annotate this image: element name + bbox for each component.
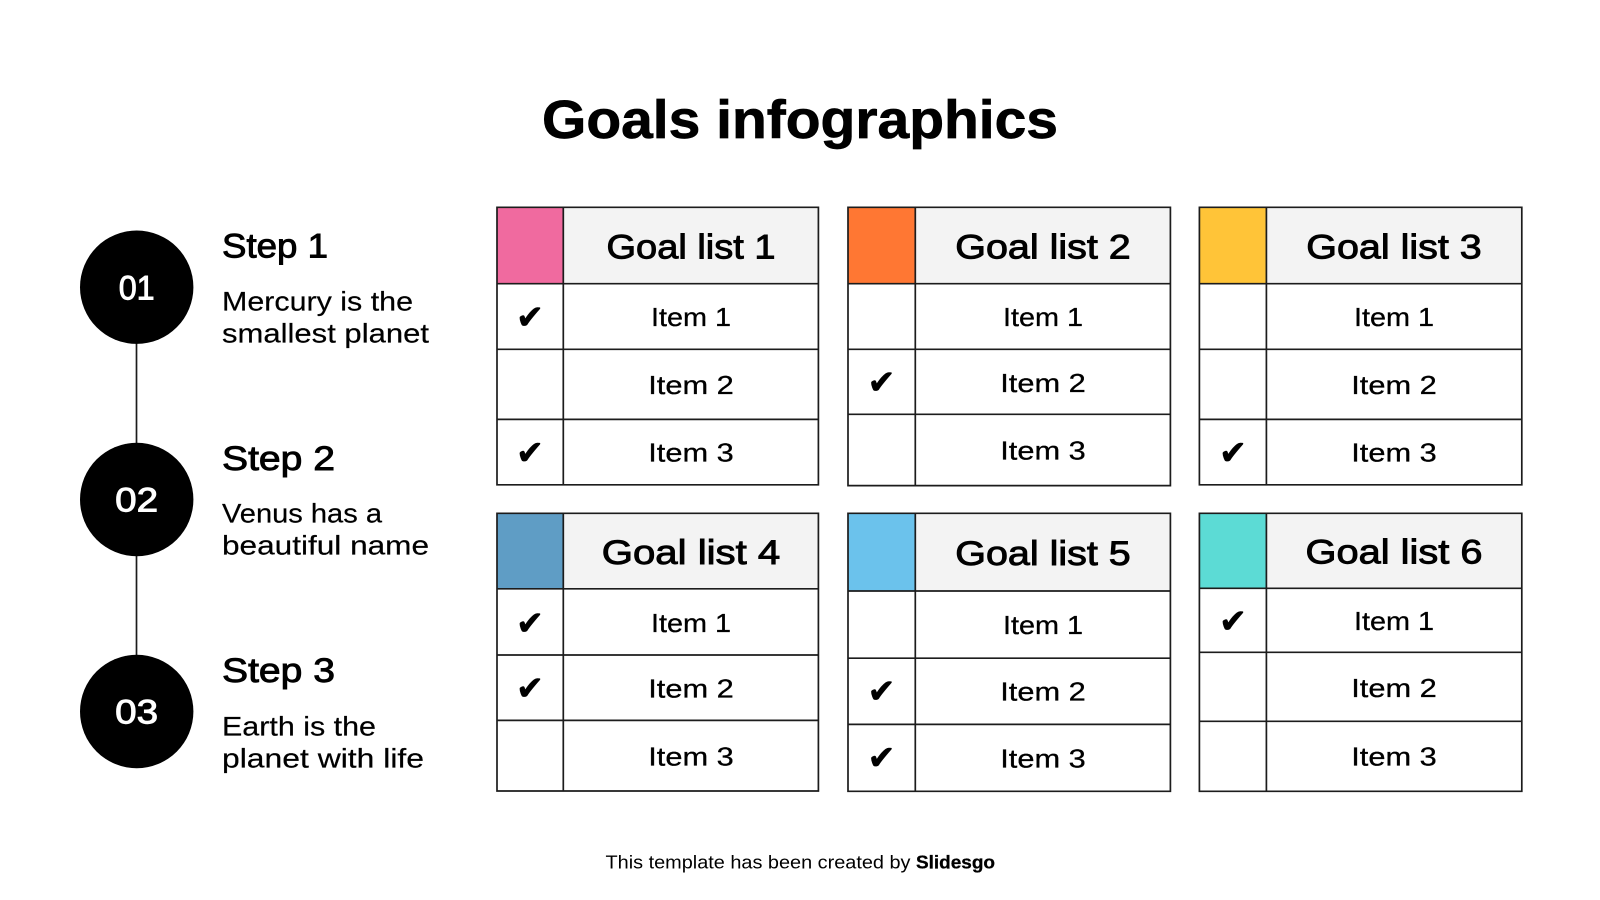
item 1: Item 1 bbox=[1354, 606, 1434, 636]
item 3 bbox=[1219, 433, 1437, 472]
step 3 number badge: 03 bbox=[115, 694, 158, 732]
step 1 description: Mercury is the bbox=[222, 287, 413, 317]
item 1 bbox=[1219, 602, 1434, 640]
header background bbox=[563, 513, 818, 589]
item 1: Item 1 bbox=[1354, 302, 1434, 332]
item 3: Item 3 bbox=[1351, 742, 1437, 772]
table grid bbox=[848, 513, 1170, 791]
colour swatch: yellow bbox=[1199, 207, 1266, 284]
item 2: ✔ bbox=[516, 668, 544, 708]
item 1: Item 1 bbox=[1003, 302, 1083, 332]
table grid bbox=[497, 207, 818, 485]
header background bbox=[915, 207, 1170, 284]
table grid bbox=[848, 207, 1170, 486]
item 1: Item 1 bbox=[651, 608, 731, 638]
item 3: Item 3 bbox=[648, 438, 734, 468]
panel: steps timeline bbox=[80, 228, 430, 774]
step 1 bbox=[80, 228, 430, 349]
panel: goal list 3 bbox=[1199, 207, 1522, 485]
step 1 description bbox=[222, 287, 430, 349]
panel: goal list 6 bbox=[1199, 513, 1522, 791]
table grid bbox=[497, 513, 818, 791]
colour swatch: teal bbox=[1199, 513, 1266, 588]
panel: goal list 4 bbox=[497, 513, 818, 791]
colour swatch: pink bbox=[497, 207, 563, 284]
item 2 bbox=[868, 362, 1086, 402]
item 2: Item 2 bbox=[1000, 676, 1086, 706]
step 3 heading: Step 3 bbox=[222, 652, 335, 690]
item 2 bbox=[868, 672, 1086, 710]
item 1: ✔ bbox=[516, 604, 544, 642]
step 2 number badge bbox=[80, 443, 193, 556]
heading: Goal list 4 bbox=[602, 534, 780, 572]
step 3 description: planet with life bbox=[222, 744, 424, 774]
heading: Goal list 2 bbox=[955, 228, 1131, 266]
step 1 heading: Step 1 bbox=[222, 228, 328, 266]
item 2 bbox=[516, 668, 734, 708]
header background bbox=[915, 513, 1170, 591]
item 1: Item 1 bbox=[1003, 610, 1083, 640]
colour swatch: light blue bbox=[848, 513, 915, 591]
item 2: ✔ bbox=[868, 362, 895, 402]
header background bbox=[1266, 513, 1521, 588]
table grid bbox=[1199, 207, 1522, 485]
step 2 description: beautiful name bbox=[222, 531, 429, 561]
item 3: ✔ bbox=[1219, 433, 1247, 472]
item 3: Item 3 bbox=[1000, 744, 1086, 774]
connector line: step 1 to step 2 bbox=[136, 340, 138, 448]
item 3: ✔ bbox=[868, 738, 895, 777]
heading: Goal list 5 bbox=[955, 535, 1131, 573]
item 1: Item 1 bbox=[651, 302, 731, 332]
step 1 number badge bbox=[80, 231, 193, 344]
footer credit: This template has been created by bbox=[606, 851, 911, 872]
item 2: Item 2 bbox=[1000, 368, 1086, 398]
item 2: Item 2 bbox=[1351, 673, 1437, 703]
item 3: ✔ bbox=[516, 433, 544, 472]
item 1: ✔ bbox=[516, 298, 544, 336]
item 2: Item 2 bbox=[648, 370, 734, 400]
item 1 bbox=[516, 604, 731, 642]
header background bbox=[563, 207, 818, 284]
panel: goal list 2 bbox=[848, 207, 1170, 486]
header background bbox=[1266, 207, 1521, 284]
item 1 bbox=[516, 298, 731, 336]
heading: Goal list 3 bbox=[1306, 228, 1482, 266]
item 3: Item 3 bbox=[1000, 436, 1086, 466]
item 3: Item 3 bbox=[1351, 438, 1437, 468]
step 3 bbox=[80, 652, 424, 774]
step 1 description: smallest planet bbox=[222, 319, 430, 349]
step 1 number badge: 01 bbox=[119, 270, 155, 308]
item 2: Item 2 bbox=[1351, 370, 1437, 400]
item 3 bbox=[868, 738, 1086, 777]
heading: Goal list 1 bbox=[606, 228, 776, 266]
step 3 description bbox=[222, 712, 424, 774]
colour swatch: orange bbox=[848, 207, 915, 284]
footer credit: Slidesgo bbox=[916, 851, 995, 872]
step 3 description: Earth is the bbox=[222, 712, 376, 742]
step 2 heading: Step 2 bbox=[222, 440, 335, 478]
title: Goals infographics bbox=[542, 90, 1058, 150]
panel: goal list 5 bbox=[848, 513, 1170, 791]
panel: goal list 1 bbox=[497, 207, 818, 485]
step 2 description bbox=[222, 499, 429, 561]
connector line: step 2 to step 3 bbox=[136, 552, 138, 660]
item 2: ✔ bbox=[868, 672, 895, 710]
colour swatch: steel blue bbox=[497, 513, 563, 589]
step 2 description: Venus has a bbox=[222, 499, 382, 529]
heading: Goal list 6 bbox=[1306, 533, 1482, 571]
item 1: ✔ bbox=[1219, 602, 1247, 640]
step 2 number badge: 02 bbox=[115, 482, 158, 520]
item 3 bbox=[516, 433, 734, 472]
table grid bbox=[1199, 513, 1522, 791]
step 2 bbox=[80, 440, 429, 561]
item 2: Item 2 bbox=[648, 674, 734, 704]
item 3: Item 3 bbox=[648, 742, 734, 772]
step 3 number badge bbox=[80, 655, 193, 768]
